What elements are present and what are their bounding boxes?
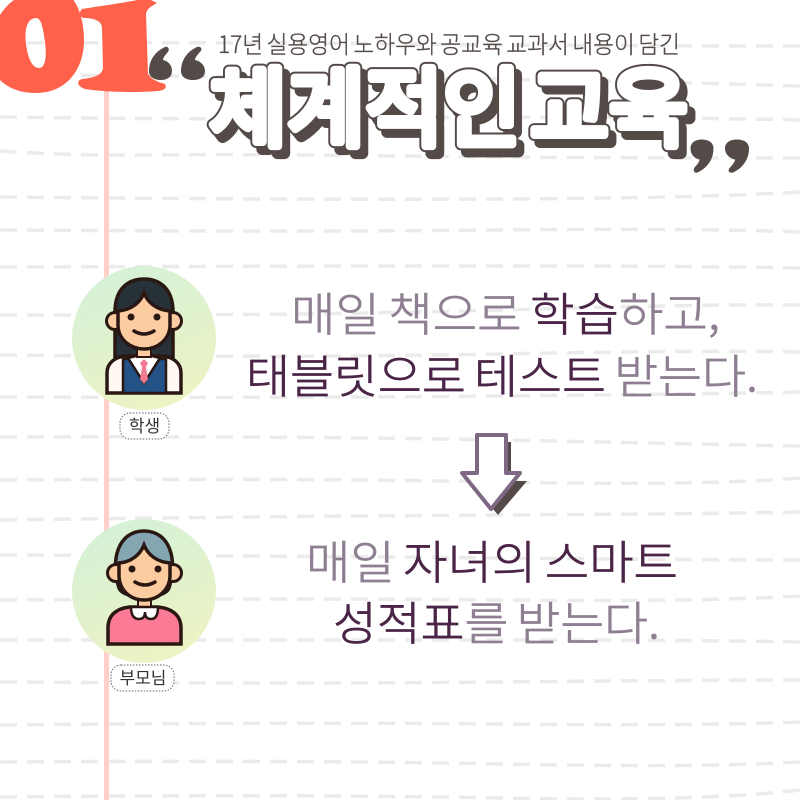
subtitle: 17년 실용영어 노하우와 공교육 교과서 내용이 담긴 bbox=[218, 25, 680, 60]
title: 체계적인 교육: 체계적인 bbox=[209, 62, 521, 158]
text block: parent line 1: 매일 자녀의 스마트 bbox=[306, 527, 678, 593]
title: 체계적인 교육: 교육 bbox=[530, 62, 688, 158]
avatar: parent bbox=[72, 519, 216, 663]
closing quotation marks bbox=[690, 140, 749, 173]
text block: student line 2: 태블릿으로 테스트 받는다. bbox=[246, 341, 758, 407]
title: 체계적인 교육: 체계적인 bbox=[215, 69, 527, 165]
opening quotation marks bbox=[149, 47, 205, 80]
label: parent: 부모님 bbox=[120, 664, 166, 689]
title: 체계적인 교육: 교육 bbox=[530, 62, 688, 158]
label: parent bbox=[111, 664, 174, 691]
text block: student line 1: 매일 책으로 학습하고, bbox=[291, 279, 720, 345]
avatar: student bbox=[72, 266, 216, 410]
label: student: 학생 bbox=[129, 412, 160, 437]
title: 체계적인 교육: 체계적인 bbox=[209, 62, 521, 158]
title: 체계적인 교육: 교육 bbox=[536, 69, 694, 165]
title: 체계적인 교육 bbox=[209, 62, 694, 165]
text block: parent line 2: 성적표를 받는다. bbox=[333, 588, 660, 654]
label: student bbox=[120, 412, 169, 439]
block arrow down bbox=[462, 435, 527, 515]
section number 01 bbox=[0, 0, 166, 93]
timeline line bbox=[104, 85, 109, 800]
